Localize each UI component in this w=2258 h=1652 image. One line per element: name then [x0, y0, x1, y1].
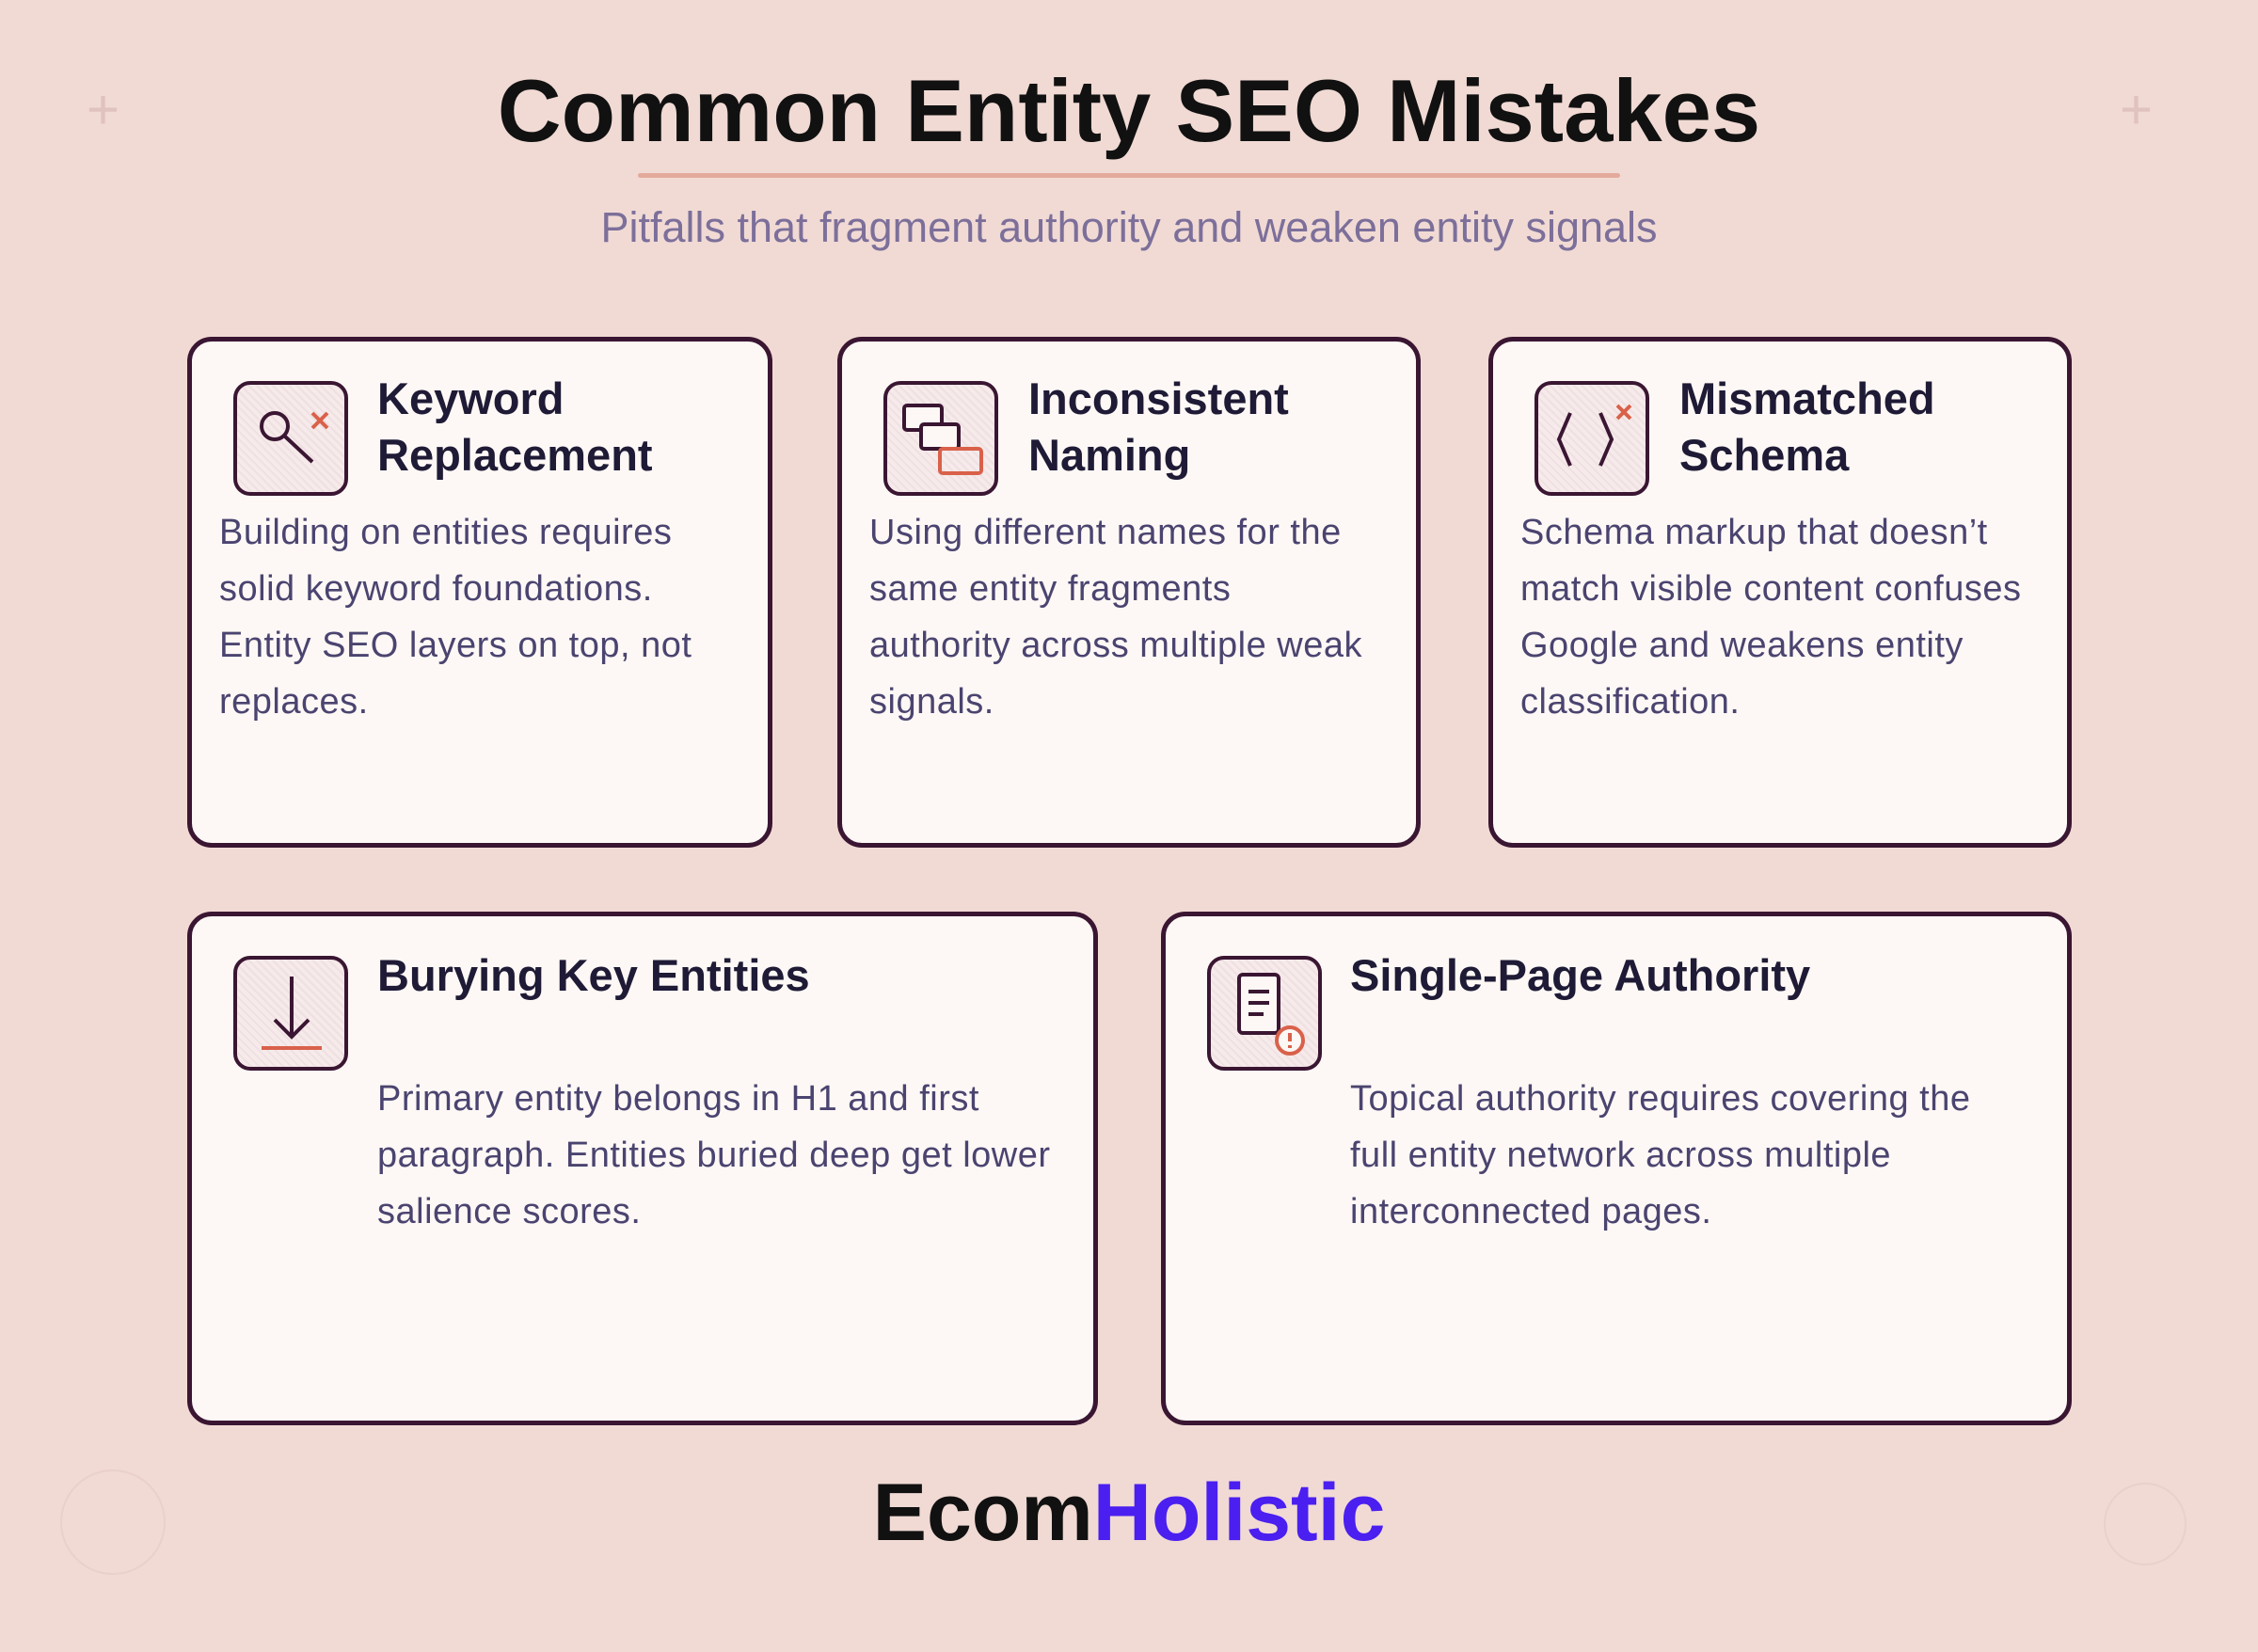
text: replaces. — [219, 682, 369, 722]
text: Building on entities requires — [219, 513, 672, 552]
icon: down arrow — [233, 956, 348, 1071]
text: Primary entity belongs in H1 and first — [377, 1079, 979, 1119]
text — [1350, 1079, 1971, 1231]
text: match visible content confuses — [1520, 569, 2021, 609]
title underline — [638, 173, 1620, 178]
panel: keyword replacement — [187, 337, 772, 848]
heading: Replacement — [377, 430, 653, 480]
heading: Keyword — [377, 373, 564, 423]
icon: stacked cards — [883, 381, 998, 496]
decorative plus left: + — [87, 78, 119, 141]
heading — [377, 373, 653, 480]
logo: EcomHolistic — [873, 1468, 1385, 1558]
text — [219, 513, 692, 722]
heading — [1028, 373, 1289, 480]
text: salience scores. — [377, 1192, 641, 1231]
text: authority across multiple weak — [869, 626, 1362, 665]
text: classification. — [1520, 682, 1740, 722]
panel: single-page authority — [1161, 912, 2072, 1425]
text: same entity fragments — [869, 569, 1231, 609]
heading: Burying Key Entities — [377, 950, 810, 1000]
panel: burying key entities — [187, 912, 1098, 1425]
text — [1520, 513, 2021, 722]
heading: Single-Page Authority — [1350, 950, 1810, 1000]
heading — [1679, 373, 1935, 480]
panel: mismatched schema — [1488, 337, 2072, 848]
heading: Schema — [1679, 430, 1849, 480]
text — [377, 1079, 1051, 1231]
decorative circle left — [60, 1469, 166, 1575]
heading: Inconsistent — [1028, 373, 1289, 423]
text: Topical authority requires covering the — [1350, 1079, 1971, 1119]
text: interconnected pages. — [1350, 1192, 1711, 1231]
panel: inconsistent naming — [837, 337, 1421, 848]
heading: Mismatched — [1679, 373, 1935, 423]
decorative plus right: + — [2120, 78, 2153, 141]
text: solid keyword foundations. — [219, 569, 653, 609]
text: Using different names for the — [869, 513, 1342, 552]
text: Schema markup that doesn’t — [1520, 513, 1988, 552]
subtitle: Pitfalls that fragment authority and weaken entity signals — [600, 203, 1658, 251]
title: Common Entity SEO Mistakes — [498, 61, 1760, 160]
text: signals. — [869, 682, 994, 722]
text: Google and weakens entity — [1520, 626, 1964, 665]
text: full entity network across multiple — [1350, 1136, 1891, 1175]
icon: code brackets — [1534, 381, 1649, 496]
text: paragraph. Entities buried deep get lower — [377, 1136, 1051, 1175]
heading: Naming — [1028, 430, 1190, 480]
text: Entity SEO layers on top, not — [219, 626, 692, 665]
icon: magnifier with x — [233, 381, 348, 496]
icon: document with alert — [1207, 956, 1322, 1071]
text — [869, 513, 1362, 722]
decorative circle right — [2104, 1483, 2186, 1565]
